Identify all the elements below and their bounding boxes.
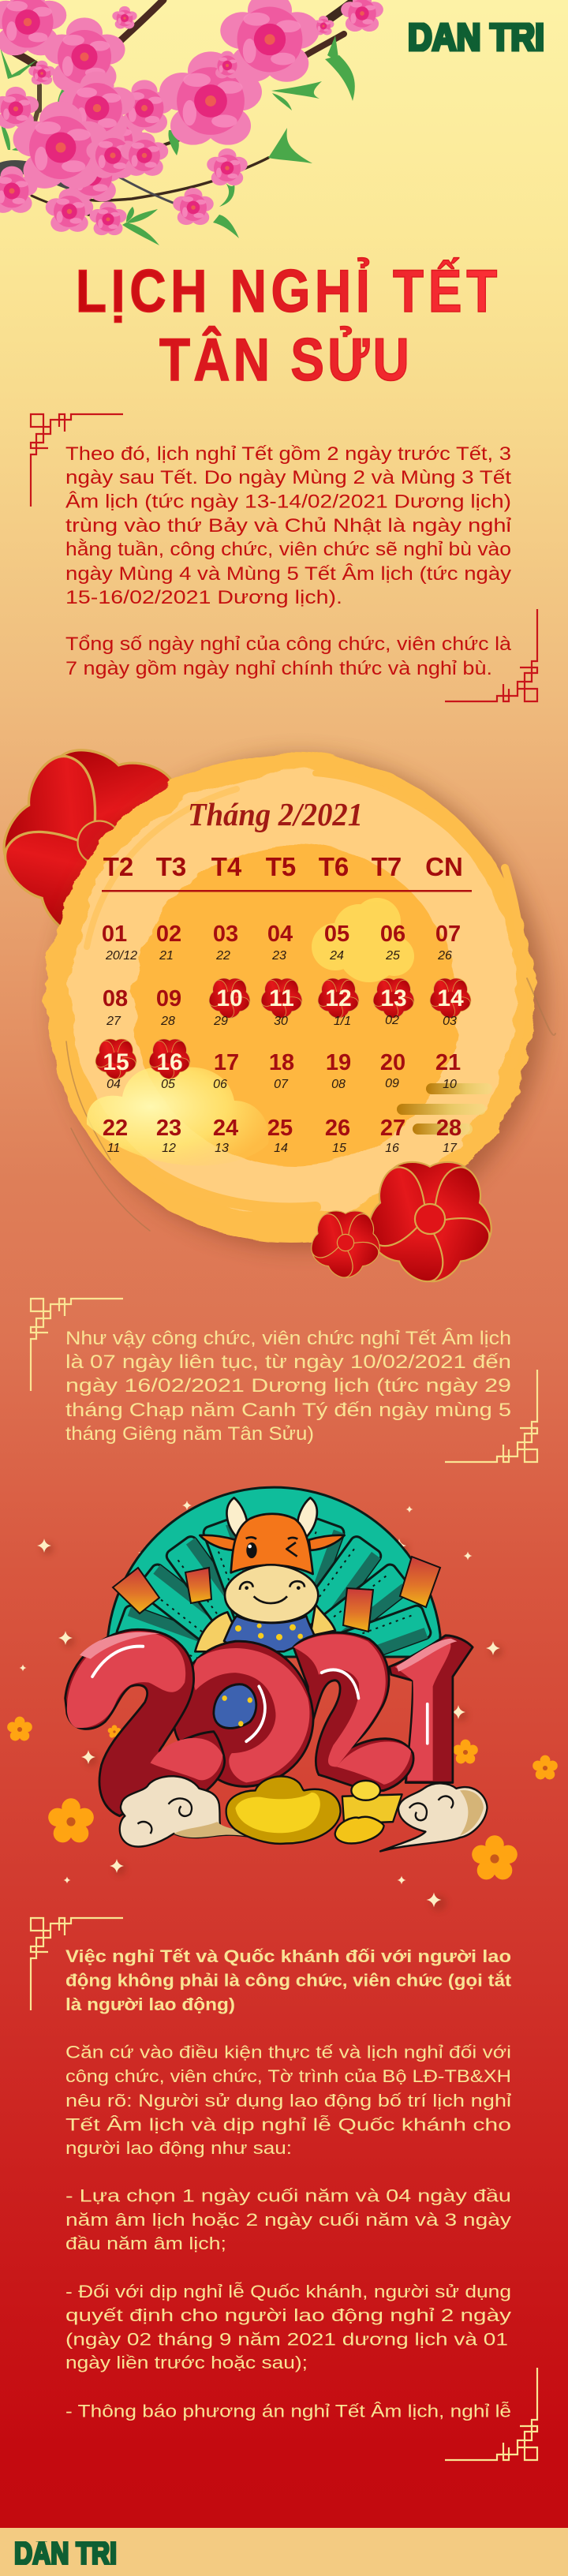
lunar dates: 15 [332, 1142, 346, 1155]
summary paragraph [65, 1328, 511, 1445]
holiday flowers [94, 978, 473, 1081]
workers paragraphs: Tết Âm lịch và dịp nghỉ lễ Quốc khánh cho [65, 2114, 511, 2135]
gold ingots [226, 1776, 402, 1844]
lunar dates: 20/12 [105, 949, 137, 963]
lunar dates: 05 [161, 1078, 175, 1091]
flower: top left of calendar [0, 743, 181, 948]
day numbers: 08 [103, 986, 128, 1011]
lunar dates: 06 [213, 1078, 227, 1091]
day numbers: 24 [213, 1116, 238, 1141]
day numbers: 04 [267, 922, 293, 947]
digit 1 [390, 1636, 473, 1782]
workers paragraphs: quyết định cho người lao động nghỉ 2 ngày [65, 2305, 511, 2325]
title: LỊCH NGHỈ TẾT [76, 257, 497, 324]
lunar dates: 02 [385, 1014, 399, 1027]
inner disc [133, 843, 458, 1167]
workers paragraphs: Căn cứ vào điều kiện thực tế và lịch nghỉ đối với [65, 2042, 511, 2062]
weekday header [103, 852, 463, 881]
day numbers: 07 [435, 922, 461, 947]
day numbers: 19 [326, 1050, 351, 1075]
lunar dates: 1/1 [334, 1015, 351, 1028]
summary paragraph: là 07 ngày liên tục, từ ngày 10/02/2021 đến [65, 1352, 511, 1373]
intro paragraph: 15-16/02/2021 Dương lịch). [65, 587, 342, 608]
star shadows [41, 1542, 503, 1911]
workers paragraphs: - Thông báo phương án nghỉ Tết Âm lịch, nghỉ lễ [65, 2402, 511, 2421]
day numbers [102, 922, 462, 1141]
cloud lower left [87, 1067, 269, 1165]
title [76, 257, 497, 393]
day numbers: 23 [156, 1116, 181, 1141]
title: TÂN SỬU [159, 326, 409, 393]
ox muzzle [225, 1565, 318, 1623]
lunar dates: 30 [274, 1015, 288, 1028]
day numbers: 05 [324, 922, 349, 947]
day numbers: 28 [436, 1116, 462, 1141]
cloud left [120, 1776, 264, 1847]
lunar dates: 16 [385, 1142, 399, 1155]
decoration: stars and orange blossoms [7, 1501, 558, 1911]
panel: intro text with corners [31, 414, 537, 701]
day numbers: 21 [435, 1050, 461, 1075]
highlighted day numbers: 10 [216, 985, 243, 1011]
lunar dates: 04 [106, 1078, 121, 1091]
corner ornament top left [31, 1299, 123, 1391]
highlighted day numbers: 15 [103, 1049, 129, 1075]
moon brush disc [46, 752, 535, 1243]
intro paragraph: ngày sau Tết. Do ngày Mùng 2 và Mùng 3 Tết [65, 467, 511, 488]
orange blossoms [7, 1717, 32, 1740]
highlighted day numbers: 14 [437, 985, 464, 1011]
workers paragraphs: công chức, viên chức, Tờ trình của Bộ LĐ-TB&XH [65, 2066, 511, 2086]
lunar dates: 22 [215, 949, 230, 963]
workers paragraphs [65, 2042, 511, 2421]
intro paragraph: Âm lịch (tức ngày 13-14/02/2021 Dương lịch) [65, 491, 511, 513]
lunar dates: 10 [443, 1078, 457, 1091]
day numbers: 03 [213, 922, 238, 947]
summary paragraph: tháng Chạp năm Canh Tý đến ngày mùng 5 [65, 1400, 511, 1421]
branches [0, 0, 355, 217]
workers paragraphs: đầu năm âm lịch; [65, 2234, 226, 2253]
day numbers: 06 [380, 922, 405, 947]
weekday header: CN [425, 852, 463, 881]
highlighted day numbers: 12 [325, 985, 352, 1011]
blossoms [0, 0, 66, 55]
workers paragraphs: - Lựa chọn 1 ngày cuối năm và 04 ngày đầu [65, 2185, 511, 2206]
lunar dates: 17 [443, 1142, 458, 1155]
footer band [0, 2528, 568, 2576]
brush arcs [66, 773, 555, 1231]
lunar dates: 08 [331, 1078, 346, 1091]
logo: Dân Trí top right: DÂN TRÍ [408, 15, 545, 59]
red envelopes [113, 1557, 440, 1632]
day numbers: 18 [269, 1050, 294, 1075]
lunar dates: 12 [162, 1142, 176, 1155]
workers paragraphs: người lao động như sau: [65, 2138, 292, 2158]
digit 2 left [65, 1629, 225, 1816]
ox shirt [224, 1616, 316, 1651]
day numbers: 26 [325, 1116, 350, 1141]
numerals and ingots [65, 1629, 487, 1851]
day numbers: 27 [380, 1116, 405, 1141]
workers heading: là người lao động) [65, 1995, 235, 2014]
weekday header: T6 [319, 852, 349, 881]
calendar title: Tháng 2/2021 [188, 796, 363, 832]
brush ring [70, 771, 517, 1214]
day numbers: 02 [156, 922, 181, 947]
workers heading: Việc nghỉ Tết và Quốc khánh đối với người lao [65, 1946, 511, 1966]
ox horns [226, 1497, 247, 1537]
digit 0 [174, 1641, 313, 1786]
ox arms [195, 1612, 239, 1651]
lunar dates: 27 [106, 1015, 121, 1028]
digit 2 right [293, 1632, 413, 1791]
ox ears [200, 1535, 235, 1550]
day numbers: 17 [214, 1050, 239, 1075]
workers paragraphs: nêu rõ: Người sử dụng lao động bố trí lịch nghỉ [65, 2091, 511, 2111]
weekday header: T3 [156, 852, 186, 881]
moon shadow [54, 756, 546, 1248]
calendar [94, 796, 473, 1155]
highlighted day numbers [103, 985, 464, 1075]
intro paragraph: Tổng số ngày nghỉ của công chức, viên chức là [65, 634, 512, 655]
weekday header: T4 [211, 852, 242, 881]
teal fan [108, 1487, 440, 1677]
highlighted day numbers: 13 [380, 985, 407, 1011]
workers paragraphs: năm âm lịch hoặc 2 ngày cuối năm và 3 ngày [65, 2210, 511, 2230]
day numbers: 25 [267, 1116, 293, 1141]
day numbers: 22 [103, 1116, 128, 1141]
gold cloud bands [397, 1083, 492, 1135]
lunar dates: 07 [274, 1078, 289, 1091]
illustration: ox and 2021 [65, 1487, 487, 1851]
ox head [231, 1514, 313, 1574]
corner ornament bottom right [445, 1370, 537, 1462]
lunar dates: 24 [329, 949, 344, 963]
lunar dates: 23 [271, 949, 286, 963]
weekday header: T2 [103, 852, 133, 881]
lunar dates: 13 [215, 1142, 229, 1155]
day numbers: 01 [102, 922, 127, 947]
flowers: bottom of calendar [308, 1162, 496, 1288]
highlighted day numbers: 16 [156, 1049, 183, 1075]
panel: calendar moon [46, 752, 555, 1248]
lunar dates: 29 [213, 1015, 228, 1028]
panel: summary text with corners [31, 1299, 537, 1462]
weekday header: T5 [266, 852, 296, 881]
logo: Dân Trí footer: DÂN TRÍ [14, 2535, 118, 2571]
ox [195, 1497, 345, 1651]
corner ornament bottom right [445, 609, 537, 701]
day numbers: 20 [380, 1050, 405, 1075]
intro paragraph: trùng vào thứ Bảy và Chủ Nhật là ngày nghỉ [65, 515, 512, 537]
workers paragraphs: ngày liền trước hoặc sau); [65, 2353, 308, 2372]
leaves [0, 36, 355, 245]
lunar dates: 14 [274, 1142, 288, 1155]
corner ornament bottom right [445, 2368, 537, 2460]
lunar dates: 25 [385, 949, 400, 963]
day numbers: 09 [156, 986, 181, 1011]
intro paragraph: hằng tuần, công chức, viên chức sẽ nghỉ bù vào [65, 539, 511, 560]
illustration: peach blossom branch [0, 0, 383, 245]
summary paragraph: ngày 16/02/2021 Dương lịch (tức ngày 29 [65, 1375, 511, 1396]
cloud upper right [312, 898, 414, 982]
workers heading: động không phải là công chức, viên chức (gọi tắt [65, 1971, 512, 1990]
summary paragraph: tháng Giêng năm Tân Sửu) [65, 1423, 314, 1445]
summary paragraph: Như vậy công chức, viên chức nghỉ Tết Âm lịch [65, 1328, 511, 1349]
corner ornament top left [31, 1918, 123, 2010]
corner ornament top left [31, 414, 123, 507]
cloud right [380, 1783, 487, 1851]
lunar dates [105, 949, 458, 1155]
highlighted day numbers: 11 [269, 985, 294, 1011]
lunar dates: 26 [437, 949, 452, 963]
lunar dates: 11 [107, 1142, 120, 1155]
workers paragraphs: - Đối với dịp nghỉ lễ Quốc khánh, người sử dụng [65, 2282, 511, 2301]
intro paragraph: 7 ngày gồm ngày nghỉ chính thức và nghỉ bù. [65, 658, 492, 679]
panel: workers text with corners [31, 1918, 537, 2460]
lunar dates: 09 [385, 1077, 399, 1090]
lunar dates: 21 [159, 949, 174, 963]
intro paragraph: ngày Mùng 4 và Mùng 5 Tết Âm lịch (tức ngày [65, 563, 511, 585]
intro paragraph: Theo đó, lịch nghỉ Tết gồm 2 ngày trước Tết, 3 [65, 443, 511, 465]
weekday header: T7 [372, 852, 402, 881]
lunar dates: 28 [160, 1015, 175, 1028]
workers paragraphs: (ngày 02 tháng 9 năm 2021 dương lịch và 01 [65, 2329, 508, 2350]
workers heading [65, 1946, 512, 2014]
intro paragraph [65, 443, 512, 679]
lunar dates: 03 [443, 1015, 457, 1028]
